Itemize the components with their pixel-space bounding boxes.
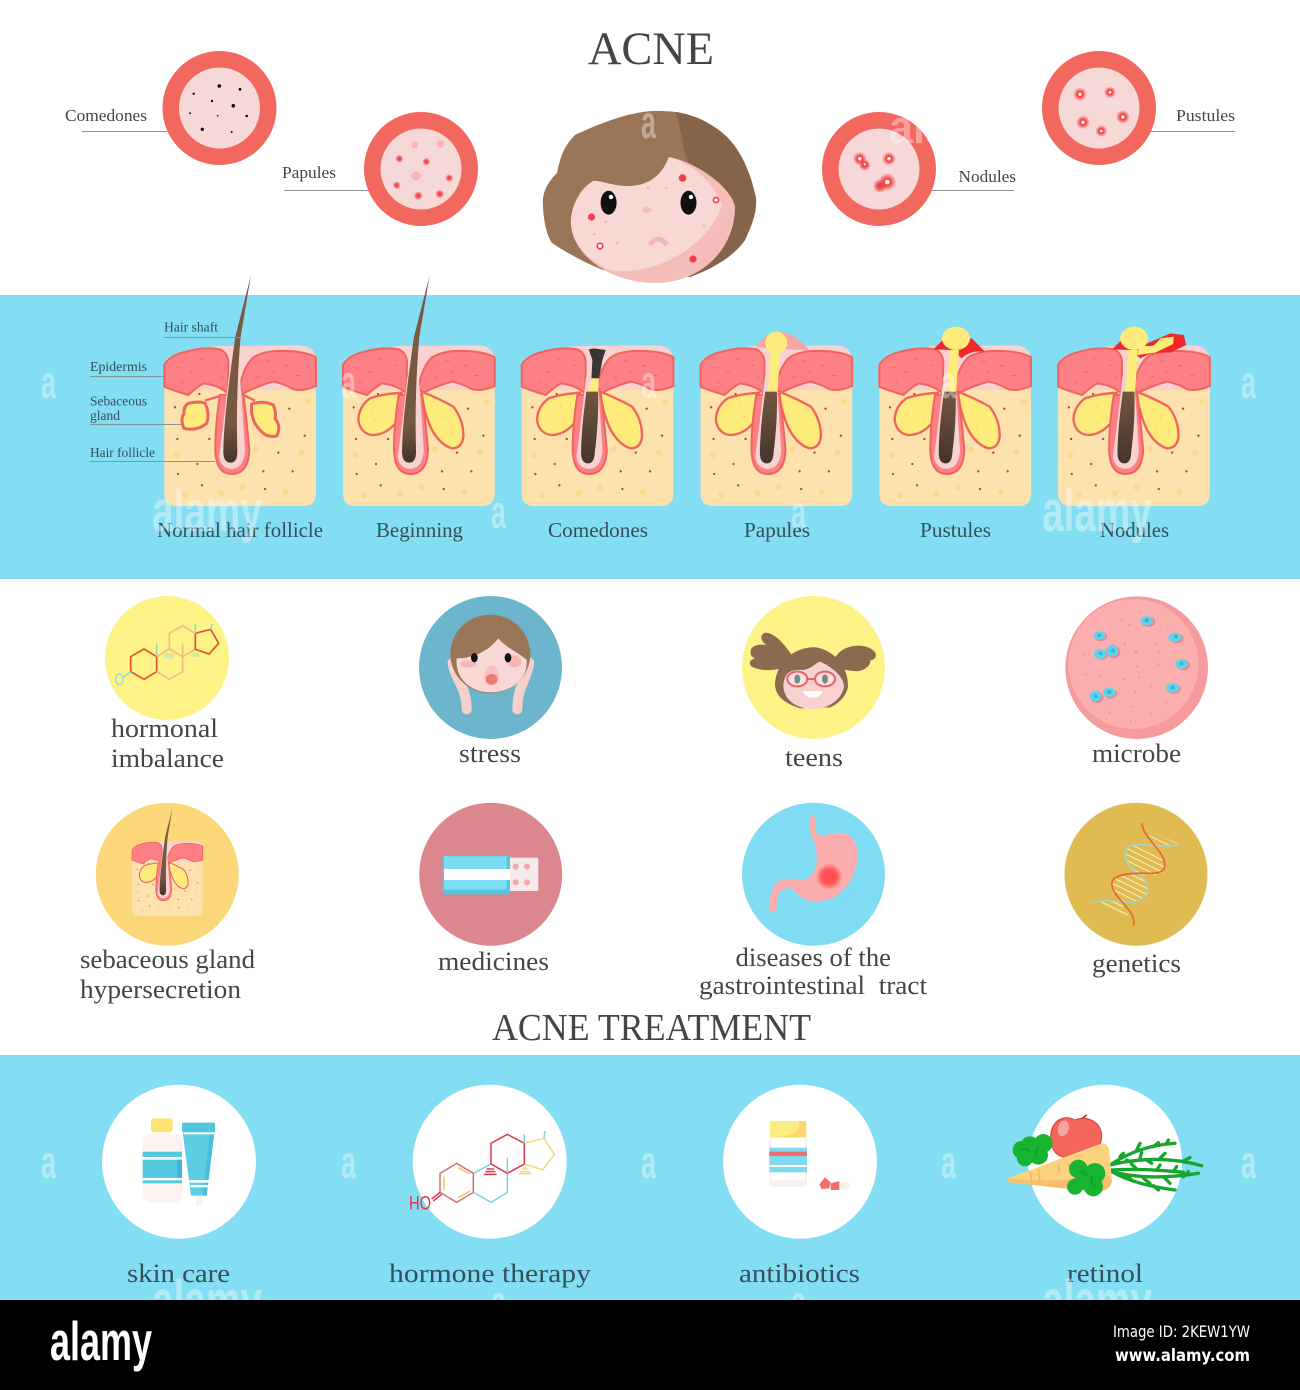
cause: sebaceous gland hypersecretion (80, 803, 255, 1004)
panel: treatment band (0, 1055, 1300, 1300)
anatomy annotations: Epidermis (90, 359, 147, 374)
cause: sebaceous gland hypersecretion: hypersecretion (80, 975, 241, 1004)
treatment: skin care: skin care (127, 1259, 230, 1288)
stage labels: Comedones (548, 518, 648, 542)
follicle: papules (701, 332, 852, 506)
acne circle: papules: Papules (282, 163, 336, 182)
treatment: retinol: retinol (1067, 1259, 1143, 1288)
watermark marks: a (491, 1276, 506, 1328)
cause: medicines (419, 803, 562, 976)
stage labels: Nodules (1100, 518, 1169, 542)
cause: microbe: microbe (1092, 739, 1181, 768)
follicle: pustules (879, 327, 1031, 506)
face with acne (543, 111, 756, 283)
cause: hormonal imbalance (105, 596, 229, 773)
watermark marks: alamy (152, 479, 262, 544)
treatment: antibiotics (723, 1085, 877, 1288)
stage labels: Normal hair follicle (157, 518, 323, 542)
cause: stress: stress (459, 739, 521, 768)
panel: causes (80, 596, 1208, 1004)
watermark marks: a (941, 1136, 956, 1188)
cause: diseases of the gastrointestinal tract: gastrointestinal tract (699, 971, 928, 1000)
treatment: antibiotics: antibiotics (739, 1259, 860, 1288)
footer bar (0, 1300, 1300, 1390)
stage labels: Beginning (376, 518, 463, 542)
watermark marks: a (641, 1136, 656, 1188)
watermark marks: a (1241, 1136, 1256, 1188)
watermark marks: a (41, 356, 56, 408)
watermark marks: a (41, 1136, 56, 1188)
cause: sebaceous gland hypersecretion: sebaceous gland (80, 945, 255, 974)
treatment: hormone therapy: HO (409, 1194, 431, 1214)
acne circle: papules (282, 112, 478, 226)
follicle: normal (164, 275, 316, 506)
stage labels: Pustules (920, 518, 991, 542)
cause: microbe (1065, 596, 1208, 768)
anatomy annotations: gland (90, 408, 120, 423)
cause: genetics: genetics (1092, 949, 1181, 978)
watermark marks: a (641, 356, 656, 408)
stage labels: Papules (744, 518, 810, 542)
acne circle: pustules: Pustules (1176, 106, 1235, 125)
watermark marks: a (791, 1276, 806, 1328)
treatment: hormone therapy: hormone therapy (389, 1259, 591, 1288)
cause: diseases of the gastrointestinal tract (699, 803, 928, 1000)
watermark marks: a (341, 356, 356, 408)
stage labels (157, 518, 1169, 542)
treatment: retinol (1007, 1085, 1202, 1288)
footer logo: alamy (50, 1310, 152, 1372)
watermark marks: alamy (152, 1269, 262, 1334)
follicle: beginning (343, 275, 495, 506)
watermark marks: a (941, 356, 956, 408)
watermark marks: a (341, 1136, 356, 1188)
watermark marks: alamy (1042, 479, 1152, 544)
follicle: nodules (1058, 327, 1210, 506)
panel: follicle stages band (0, 275, 1300, 579)
follicle: comedones (522, 345, 673, 506)
cause: teens (742, 596, 885, 772)
cause: hormonal imbalance: imbalance (111, 744, 224, 773)
acne circle: comedones (65, 51, 276, 165)
anatomy annotations: Sebaceous (90, 394, 147, 408)
anatomy annotations: Hair follicle (90, 445, 155, 460)
treatment: hormone therapy (389, 1085, 591, 1288)
watermark marks: a (641, 96, 656, 148)
image id: Image ID: 2KEW1YW (1113, 1322, 1250, 1341)
acne circle: pustules (1042, 51, 1235, 165)
treatment: skin care (102, 1085, 256, 1288)
acne circle: comedones: Comedones (65, 106, 147, 125)
panel: acne types (65, 51, 1235, 283)
website: www.alamy.com (1115, 1346, 1250, 1365)
acne circle: nodules: Nodules (958, 167, 1016, 186)
cause: diseases of the gastrointestinal tract: diseases of the (736, 943, 891, 972)
acne circle: nodules (822, 112, 1016, 226)
cause: stress (419, 596, 562, 768)
anatomy annotations (90, 320, 240, 462)
watermark marks: a (1241, 356, 1256, 408)
watermark marks: a (491, 486, 506, 538)
cause: teens: teens (785, 743, 843, 772)
cause: hormonal imbalance: hormonal (111, 714, 218, 743)
title: ACNE: ACNE (588, 23, 714, 75)
anatomy annotations: Hair shaft (164, 320, 218, 334)
watermark marks: a (791, 486, 806, 538)
cause: medicines: medicines (438, 947, 549, 976)
cause: genetics (1064, 802, 1208, 978)
watermark marks: alamy (1042, 1269, 1152, 1334)
heading: ACNE TREATMENT: ACNE TREATMENT (492, 1007, 811, 1049)
watermark marks: ala (889, 101, 949, 153)
